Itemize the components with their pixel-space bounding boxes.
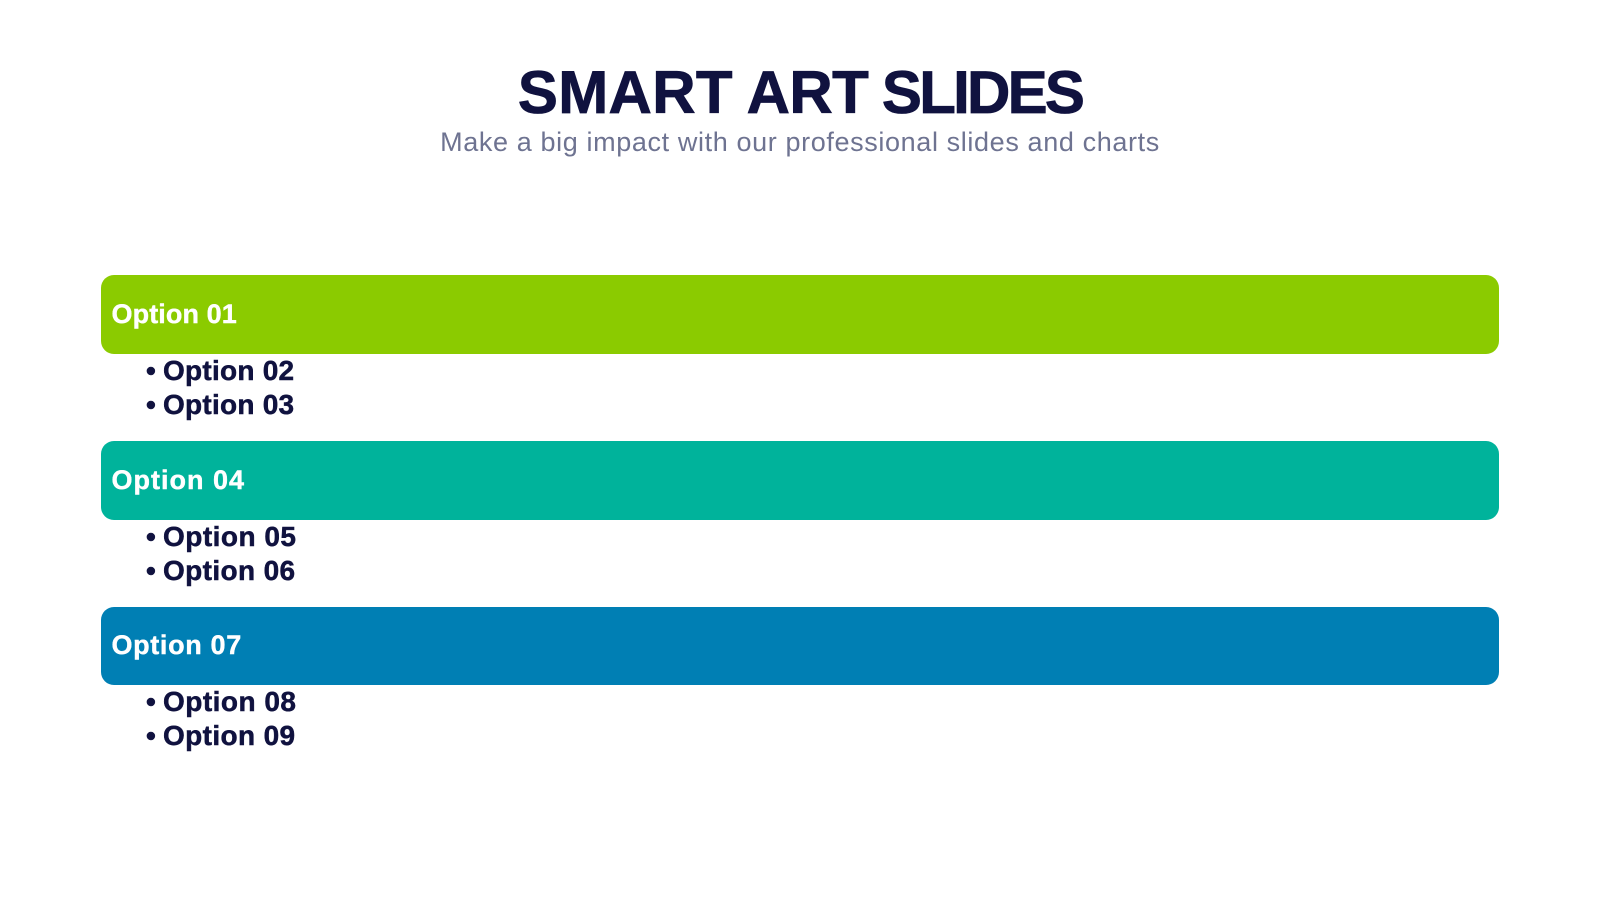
bar: option 01 (101, 275, 1499, 354)
bar: option 07: Option 07 (112, 630, 242, 660)
bar: option 04 (101, 441, 1499, 520)
list item: option 02: • (146, 355, 156, 386)
list item: option 03: Option 03 (163, 389, 294, 420)
list item: option 06: • (146, 555, 156, 586)
list item: option 05: • (146, 521, 156, 552)
subtitle: Make a big impact with our professional slides and charts (440, 127, 1160, 157)
bar: option 04: Option 04 (112, 465, 245, 495)
list item: option 09: • (146, 720, 156, 751)
list item: option 09: Option 09 (163, 720, 295, 751)
bar: option 07 (101, 607, 1499, 685)
bar: option 01: Option 01 (112, 299, 237, 329)
list item: option 03: • (146, 389, 156, 420)
list item: option 08: • (146, 686, 156, 717)
list item: option 02: Option 02 (163, 355, 294, 386)
list item: option 05: Option 05 (163, 521, 296, 552)
title: SMART ART SLIDES (518, 59, 1082, 126)
list item: option 06: Option 06 (163, 555, 295, 586)
list item: option 08: Option 08 (163, 686, 296, 717)
